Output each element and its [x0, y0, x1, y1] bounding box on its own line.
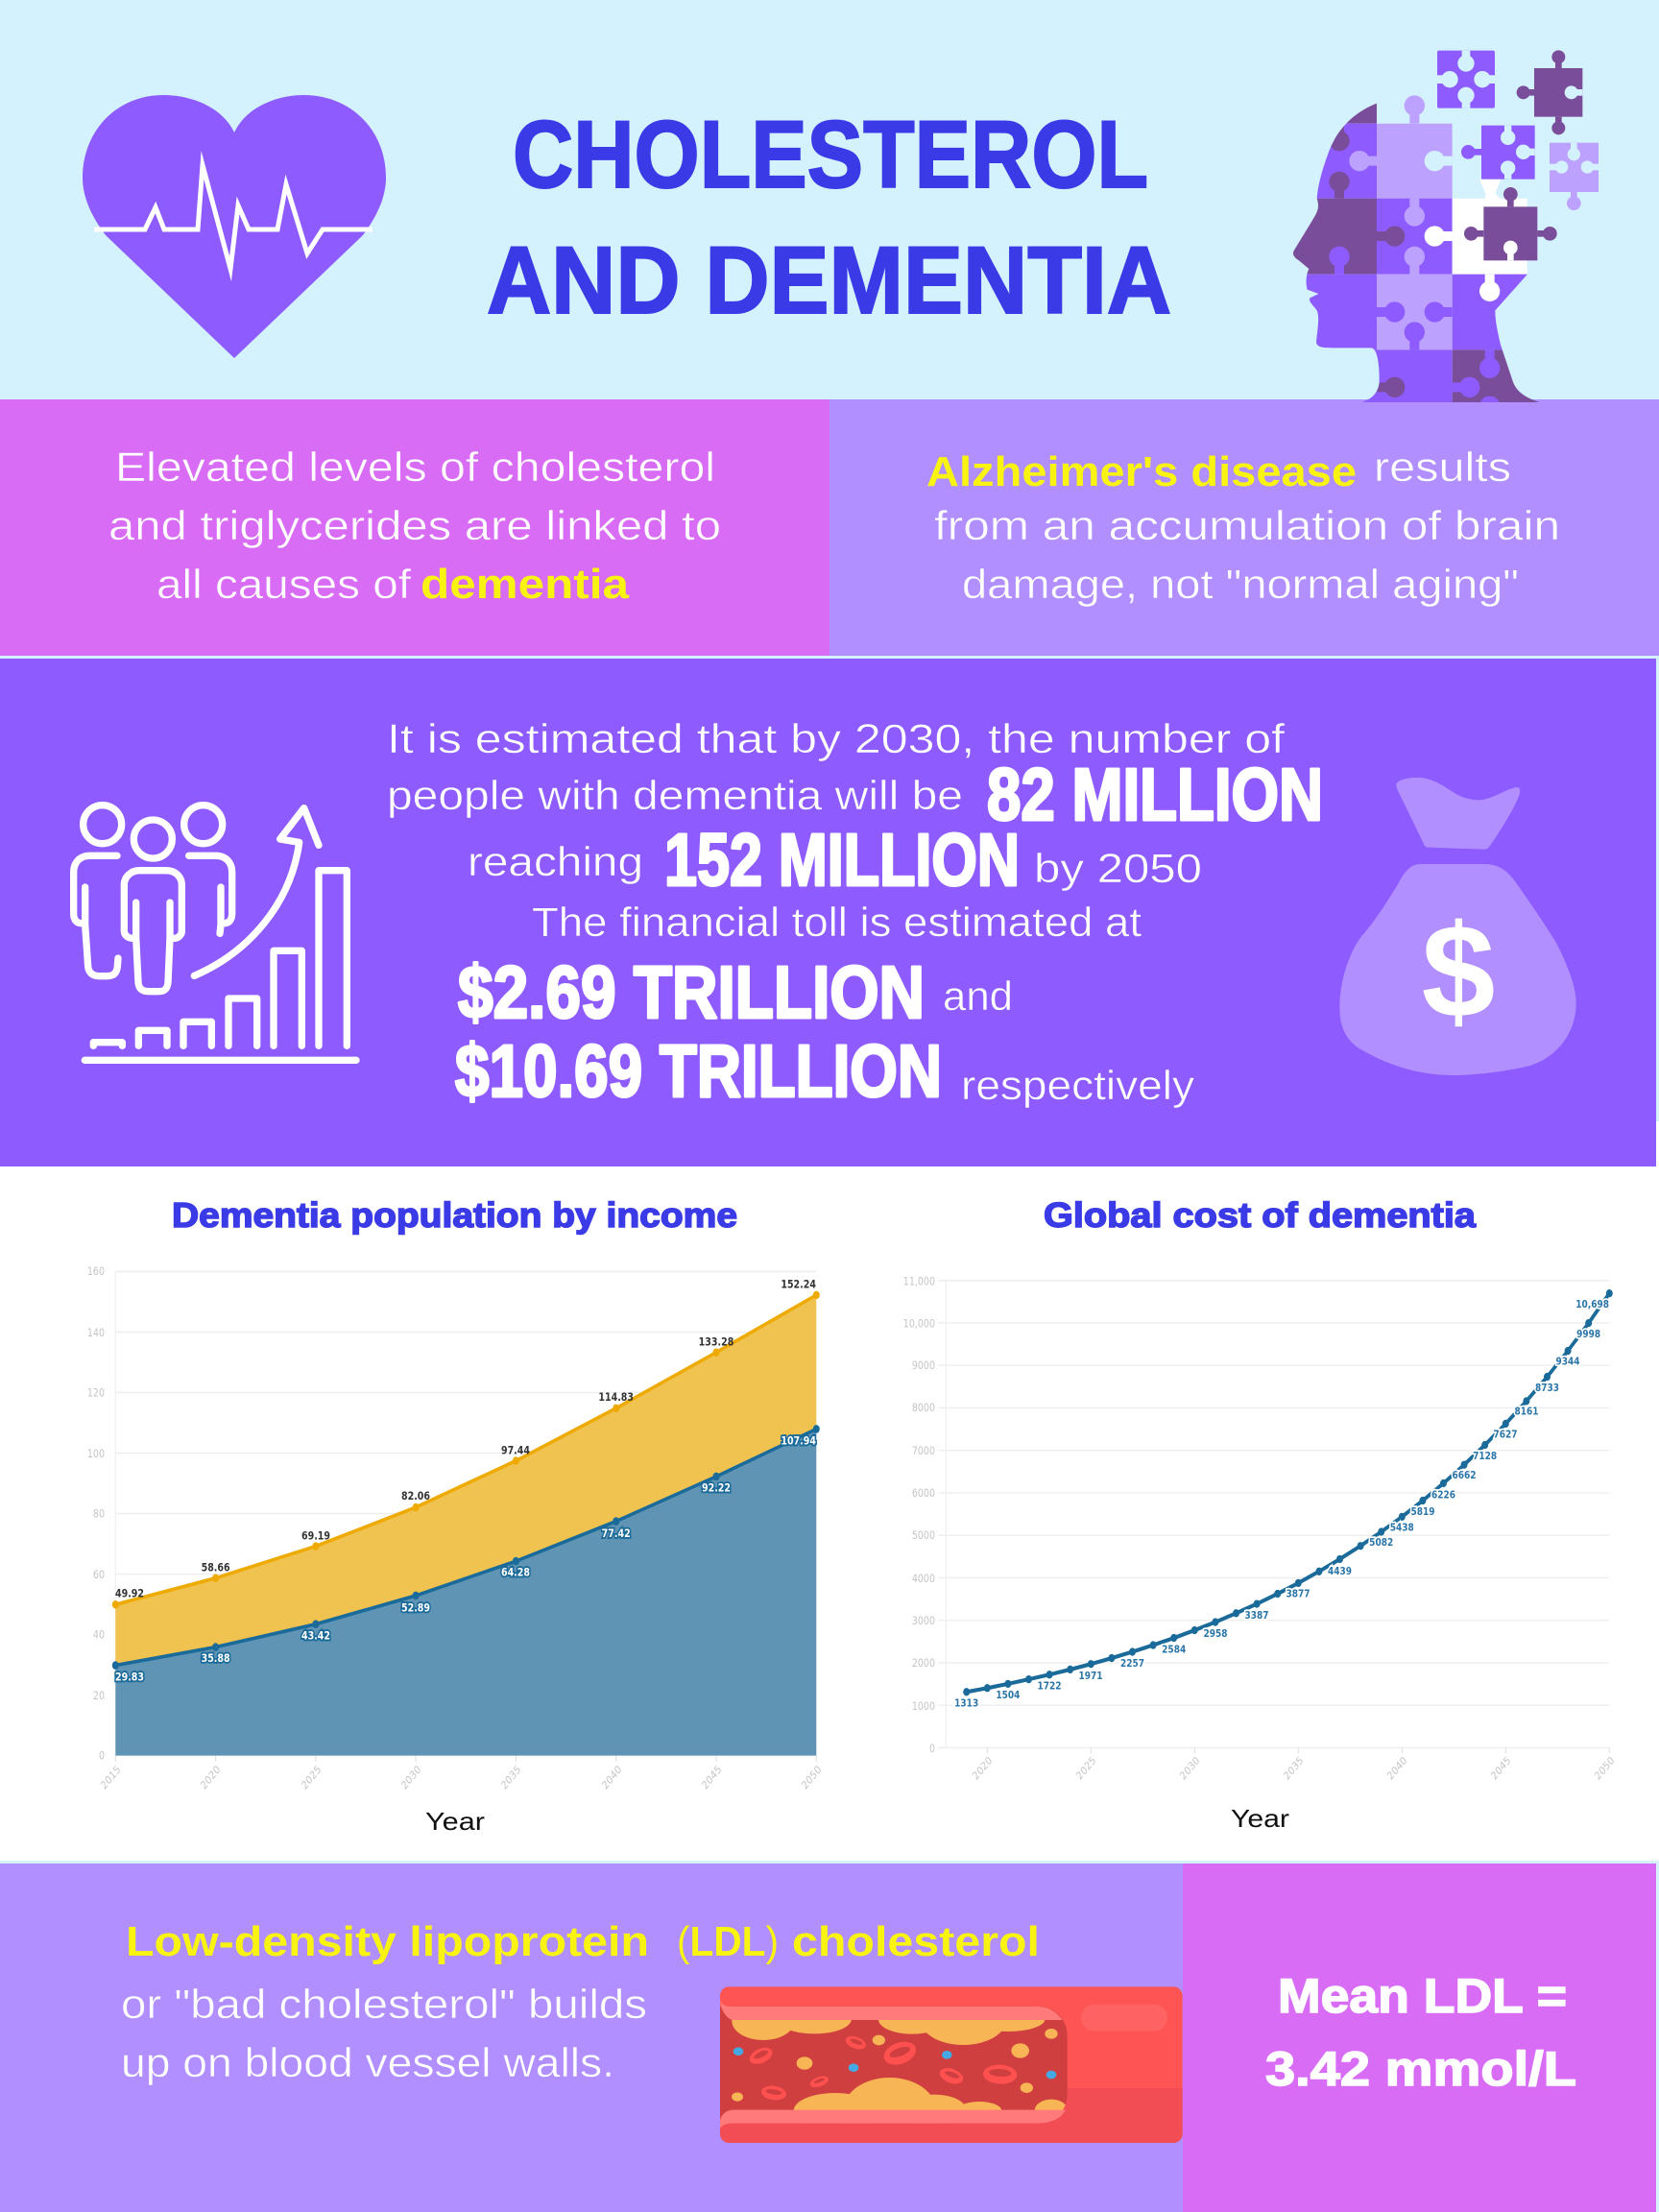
- data labels: 4439: [1328, 1566, 1352, 1577]
- plot area: population: 2020: [199, 1763, 223, 1792]
- plot area: cost: 9000: [912, 1360, 935, 1372]
- chart: global cost of dementia: Year: [1231, 1804, 1289, 1833]
- text: forecast figures: 152 MILLION: [664, 819, 1020, 902]
- data labels: 8161: [1514, 1407, 1539, 1418]
- text: forecast figures: It is estimated that by 2030, the number of: [387, 716, 1286, 762]
- data labels: 1722: [1037, 1681, 1062, 1693]
- text: forecast figures: [387, 716, 1323, 1113]
- data labels: 7128: [1473, 1451, 1497, 1462]
- text: forecast figures: respectively: [961, 1063, 1195, 1109]
- data labels: 10,698: [1575, 1300, 1609, 1310]
- data labels: 9344: [1555, 1357, 1580, 1368]
- plot area: population: 120: [87, 1385, 105, 1400]
- data labels: [115, 1278, 816, 1684]
- data labels: 43.42: [301, 1629, 330, 1643]
- data labels: 1504: [996, 1690, 1021, 1701]
- panel: LDL cholesterol: [0, 1863, 1183, 2212]
- panel: dementia link: dementia: [421, 561, 630, 608]
- panel: header: [0, 0, 1659, 399]
- chart: dementia population by income: Dementia population by income: [172, 1195, 737, 1235]
- plot area: cost: 1000: [912, 1700, 935, 1713]
- plot area: cost: 3000: [912, 1615, 935, 1627]
- data labels: 133.28: [699, 1335, 733, 1349]
- chart: global cost of dementia: [903, 1195, 1617, 1833]
- plot area: population: 2050: [800, 1763, 824, 1792]
- data labels: 49.92: [115, 1587, 144, 1600]
- data labels: 5819: [1410, 1506, 1435, 1518]
- data labels: 29.83: [115, 1671, 144, 1684]
- plot area: cost: 11,000: [903, 1276, 935, 1288]
- line: lower series: [115, 1429, 816, 1666]
- text: forecast figures: $2.69 TRILLION: [458, 951, 925, 1034]
- panel: Alzheimer's disease: damage, not "normal aging": [962, 562, 1519, 608]
- panel: LDL cholesterol: Low-density lipoprotein: [126, 1918, 649, 1965]
- panel: mean LDL callout: 3.42 mmol/L: [1265, 2042, 1576, 2096]
- chart: dementia population by income: [87, 1195, 824, 1836]
- plot area: cost: 2045: [1489, 1754, 1513, 1783]
- plot area: population: 100: [87, 1447, 105, 1460]
- data labels: 3387: [1244, 1610, 1269, 1622]
- data labels: 58.66: [202, 1561, 230, 1575]
- plot area: cost: 2020: [971, 1754, 995, 1783]
- text: forecast figures: The financial toll is estimated at: [532, 900, 1142, 946]
- plot area: cost: 5000: [912, 1529, 935, 1542]
- data labels: 107.94: [781, 1434, 816, 1448]
- data labels: 97.44: [501, 1443, 530, 1457]
- panel: Alzheimer's disease: from an accumulation of brain: [934, 503, 1560, 549]
- plot area: population: 2025: [300, 1763, 324, 1792]
- panel: LDL cholesterol: up on blood vessel walls.: [121, 2040, 614, 2086]
- plot area: cost: 2040: [1385, 1754, 1409, 1783]
- title: AND DEMENTIA: [487, 227, 1171, 333]
- plot area: population: 40: [93, 1628, 105, 1642]
- area: upper income band: [115, 1295, 816, 1666]
- panel: dementia link: and triglycerides are linked to: [108, 503, 721, 549]
- icon: money bag: [1339, 778, 1576, 1075]
- chart: dementia population by income: Year: [425, 1807, 485, 1836]
- icon: head made of puzzle pieces: [1286, 50, 1599, 417]
- plot area: population: 2045: [700, 1763, 724, 1792]
- plot area: cost: 2025: [1074, 1754, 1098, 1783]
- plot area: cost: 2030: [1178, 1754, 1202, 1783]
- text: forecast figures: and: [943, 974, 1013, 1020]
- plot area: population: 160: [87, 1264, 105, 1278]
- plot area: cost: 2050: [1593, 1754, 1617, 1783]
- text: forecast figures: $10.69 TRILLION: [455, 1030, 942, 1113]
- panel: population and cost forecast: [0, 659, 1656, 1166]
- data labels: [954, 1300, 1609, 1710]
- panel: Alzheimer's disease: results: [1374, 445, 1511, 491]
- data labels: 1971: [1078, 1671, 1103, 1682]
- plot area: population: 0: [99, 1749, 105, 1763]
- chart: global cost of dementia: Global cost of dementia: [1044, 1195, 1477, 1235]
- plot area: population: 20: [93, 1689, 105, 1702]
- data labels: 114.83: [598, 1390, 634, 1404]
- panel: Alzheimer's disease: [830, 399, 1659, 656]
- icon: people with growth chart: [74, 805, 356, 1060]
- plot area: population: 80: [93, 1506, 105, 1521]
- panel: mean LDL callout: [1183, 1863, 1656, 2212]
- floating pieces: [1437, 50, 1599, 260]
- line: cost series: [967, 1293, 1609, 1692]
- icon: heart with pulse: [83, 95, 386, 358]
- data labels: 3877: [1286, 1589, 1310, 1600]
- plot area: cost: 6000: [912, 1487, 935, 1500]
- icon: money bag: $: [1422, 898, 1495, 1046]
- panel: dementia link: Elevated levels of cholesterol: [115, 445, 715, 491]
- plot area: population: 2030: [399, 1763, 423, 1792]
- plot area: cost: 7000: [912, 1445, 935, 1457]
- area: lower income band: [115, 1429, 816, 1756]
- panel: mean LDL callout: Mean LDL =: [1278, 1969, 1567, 2023]
- data labels: 64.28: [501, 1566, 530, 1579]
- panel: LDL cholesterol: (LDL): [677, 1918, 779, 1965]
- plot area: cost: [903, 1276, 1617, 1783]
- data labels: 2584: [1162, 1645, 1186, 1656]
- data labels: 6662: [1452, 1470, 1477, 1481]
- plot area: cost: 2035: [1282, 1754, 1306, 1783]
- plot area: cost: 2000: [912, 1657, 935, 1670]
- data labels: 7627: [1493, 1430, 1518, 1441]
- panel: dementia link: all causes of: [156, 562, 412, 608]
- plot area: cost: 10,000: [903, 1318, 935, 1331]
- panel: Alzheimer's disease: Alzheimer's disease: [926, 448, 1357, 495]
- title: CHOLESTEROL: [513, 101, 1148, 207]
- data labels: 2958: [1203, 1628, 1228, 1640]
- plot area: population: 2040: [600, 1763, 624, 1792]
- text: forecast figures: 82 MILLION: [987, 754, 1323, 836]
- plot area: population: 140: [87, 1326, 105, 1339]
- plot area: population: 60: [93, 1568, 105, 1581]
- panel: LDL cholesterol: or "bad cholesterol" builds: [121, 1982, 647, 2028]
- panel: LDL cholesterol: cholesterol: [792, 1918, 1040, 1965]
- panel: charts: [0, 1121, 1659, 1861]
- plot area: cost: 8000: [912, 1402, 935, 1414]
- data labels: 5438: [1390, 1523, 1414, 1534]
- data labels: 152.24: [781, 1278, 816, 1291]
- panel: dementia link: [0, 399, 830, 656]
- text: forecast figures: reaching: [468, 839, 643, 885]
- data labels: 2257: [1120, 1658, 1144, 1670]
- data labels: 52.89: [401, 1600, 430, 1615]
- data labels: 8733: [1535, 1382, 1559, 1394]
- data labels: 1313: [954, 1698, 978, 1710]
- data labels: 92.22: [702, 1481, 731, 1495]
- data labels: 77.42: [602, 1527, 631, 1541]
- text: forecast figures: by 2050: [1034, 846, 1202, 892]
- text: forecast figures: people with dementia will be: [387, 773, 963, 819]
- data labels: 69.19: [301, 1529, 330, 1543]
- title: [487, 101, 1171, 333]
- data labels: 6226: [1431, 1490, 1455, 1502]
- plot area: population: 2035: [499, 1763, 523, 1792]
- line: total series: [115, 1295, 816, 1604]
- plot area: population: 2015: [99, 1763, 123, 1792]
- data labels: 82.06: [401, 1489, 430, 1503]
- data labels: 9998: [1576, 1329, 1600, 1340]
- icon: blood vessel with plaque: [720, 1986, 1183, 2144]
- plot area: population: [87, 1264, 824, 1792]
- plot area: cost: 4000: [912, 1573, 935, 1585]
- data labels: 35.88: [202, 1651, 230, 1665]
- data labels: 5082: [1369, 1537, 1393, 1549]
- plot area: cost: 0: [929, 1743, 935, 1755]
